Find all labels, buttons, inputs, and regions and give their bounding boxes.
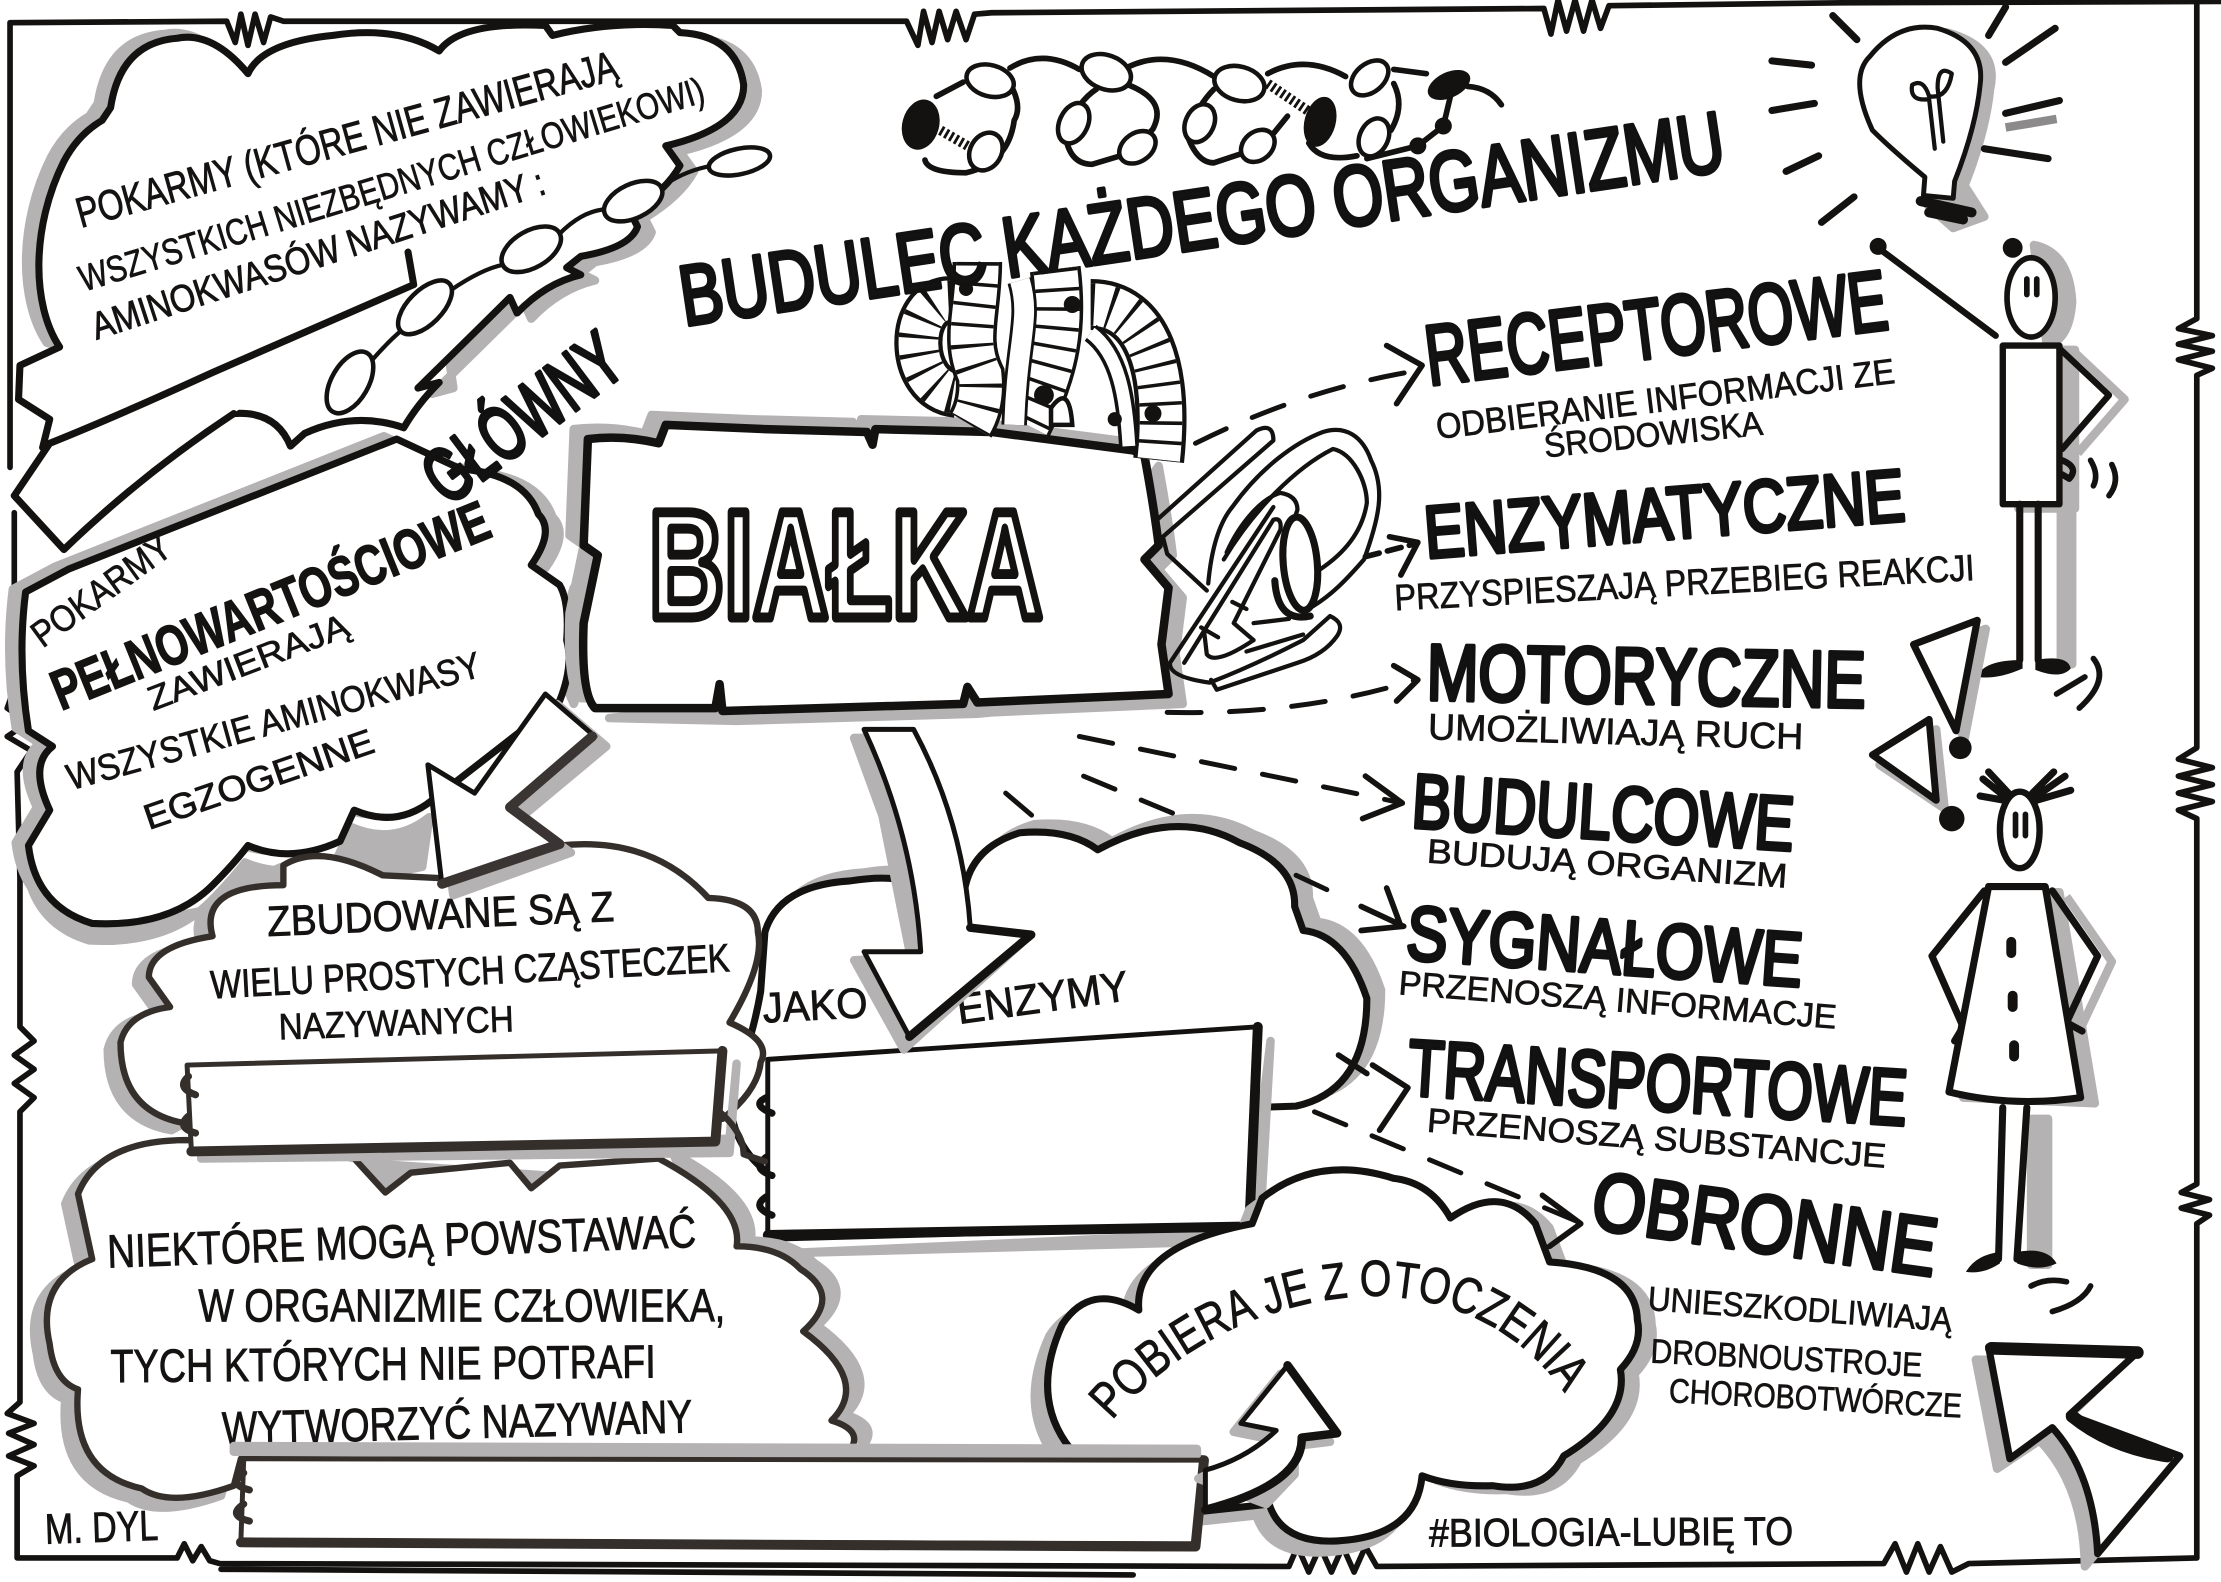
function: obronne: UNIESZKODLIWIAJĄ bbox=[1647, 1280, 1953, 1339]
text: pokarmy pełnowartościowe: POKARMY bbox=[23, 526, 179, 655]
text: jako enzymy bbox=[762, 963, 1131, 1034]
function: obronne: CHOROBOTWÓRCZE bbox=[1668, 1372, 1963, 1425]
text: pokarmy question bbox=[71, 42, 709, 348]
function: sygnałowe: PRZENOSZĄ INFORMACJE bbox=[1397, 964, 1838, 1037]
hashtag: biologia lubię to: #BIOLOGIA-LUBIĘ TO bbox=[1429, 1510, 1793, 1556]
arrow: to transportowe bbox=[1339, 1055, 1408, 1130]
text: zbudowane są z: NAZYWANYCH bbox=[278, 998, 514, 1048]
answer box: exogenous amino acids ribbon bbox=[234, 1446, 1204, 1547]
protein structure: helices bbox=[918, 262, 1161, 460]
arrow: from ribbon to environment cloud bbox=[1198, 1365, 1337, 1511]
cloud: some produced in the body bbox=[34, 1140, 868, 1508]
title: główny budulec każdego organizmu bbox=[407, 95, 1731, 521]
arrow: to receptorowe bbox=[1195, 346, 1422, 443]
function: receptorowe bbox=[1420, 253, 1897, 465]
function: transportowe: PRZENOSZĄ SUBSTANCJE bbox=[1426, 1102, 1888, 1176]
text: pokarmy pełnowartościowe: ZAWIERAJĄ bbox=[142, 607, 355, 718]
protein structure: bead chain top bbox=[896, 48, 1501, 177]
text: pokarmy question: POKARMY (KTÓRE NIE ZAWIERAJĄ bbox=[71, 42, 623, 238]
text: niektóre mogą powstawać bbox=[106, 1205, 725, 1455]
function: transportowe bbox=[1405, 1023, 1910, 1176]
function: receptorowe: RECEPTOROWE bbox=[1420, 253, 1893, 404]
text: zbudowane są z: ZBUDOWANE SĄ Z bbox=[266, 884, 615, 946]
title: główny budulec każdego organizmu: GŁÓWNY bbox=[407, 316, 639, 521]
bead chain: amino acids left bbox=[317, 143, 773, 421]
answer box: molecules bbox=[184, 1051, 765, 1161]
text: pokarmy pełnowartościowe: EGZOGENNE bbox=[138, 721, 379, 838]
text: pokarmy pełnowartościowe: PEŁNOWARTOŚCIOWE bbox=[42, 489, 499, 723]
function: sygnałowe: SYGNAŁOWE bbox=[1404, 891, 1805, 1003]
icon: exclamation marks bbox=[1872, 620, 1986, 831]
heading: białka: BIAŁKA bbox=[649, 481, 1043, 651]
function: transportowe: TRANSPORTOWE bbox=[1405, 1023, 1910, 1142]
arrow: complete proteins to molecules bbox=[428, 694, 606, 895]
function: motoryczne bbox=[1426, 628, 1867, 757]
function: budulcowe: BUDULCOWE bbox=[1410, 759, 1797, 867]
arrow: to sygnałowe bbox=[1006, 776, 1404, 931]
arrow: to motoryczne bbox=[1167, 666, 1418, 713]
text: pokarmy question: WSZYSTKICH NIEZBĘDNYCH CZŁOWIEKOWI) bbox=[74, 70, 709, 299]
answer ribbon: blank label bbox=[14, 252, 414, 550]
text: pokarmy question: AMINOKWASÓW NAZYWAMY : bbox=[86, 161, 550, 348]
function: motoryczne: MOTORYCZNE bbox=[1426, 628, 1867, 724]
arrow: to budulcowe bbox=[1079, 736, 1402, 819]
arrow: białka down to enzymes bbox=[854, 729, 1031, 1049]
icon: light bulb bbox=[1772, 7, 2059, 228]
text: niektóre mogą powstawać: TYCH KTÓRYCH NIE POTRAFI bbox=[110, 1336, 656, 1392]
cloud: takes from environment bbox=[1030, 1166, 1657, 1557]
cloud: built of simple molecules bbox=[108, 844, 763, 1130]
text: zbudowane są z bbox=[209, 884, 731, 1048]
answer box: enzymes bbox=[760, 1027, 1271, 1253]
figure: stick man pointing bbox=[1870, 238, 2125, 708]
text: jako enzymy: ENZYMY bbox=[954, 963, 1131, 1034]
function: obronne: DROBNOUSTROJE bbox=[1650, 1333, 1923, 1385]
text: niektóre mogą powstawać: NIEKTÓRE MOGĄ POWSTAWAĆ bbox=[106, 1205, 697, 1278]
text: zbudowane są z: WIELU PROSTYCH CZĄSTECZEK bbox=[209, 936, 731, 1007]
function: budulcowe bbox=[1410, 759, 1797, 896]
figure: stick woman bbox=[1932, 772, 2112, 1311]
text: jako enzymy: JAKO bbox=[762, 980, 869, 1033]
protein structure: folded loops bbox=[1159, 428, 1379, 690]
function: receptorowe: ŚRODOWISKA bbox=[1542, 404, 1765, 465]
text: pokarmy pełnowartościowe: WSZYSTKIE AMINOKWASY bbox=[62, 644, 485, 798]
text: pokarmy pełnowartościowe bbox=[23, 489, 499, 838]
cloud: complete proteins bbox=[9, 436, 583, 941]
arrow: to obronne bbox=[1314, 1112, 1581, 1246]
title: główny budulec każdego organizmu: BUDULEC KAŻDEGO ORGANIZMU bbox=[673, 95, 1731, 345]
text: niektóre mogą powstawać: WYTWORZYĆ NAZYWANY bbox=[221, 1390, 693, 1455]
function: enzymatyczne: PRZYSPIESZAJĄ PRZEBIEG REAKCJI bbox=[1393, 547, 1975, 618]
main box: białka bbox=[569, 415, 1183, 721]
function: obronne bbox=[1587, 1156, 1963, 1425]
author: m. dyl: M. DYL bbox=[44, 1503, 159, 1554]
function: obronne: OBRONNE bbox=[1587, 1156, 1943, 1294]
text: niektóre mogą powstawać: W ORGANIZMIE CZŁOWIEKA, bbox=[198, 1279, 725, 1331]
function: enzymatyczne bbox=[1393, 453, 1975, 618]
function: receptorowe: ODBIERANIE INFORMACJI ZE bbox=[1434, 351, 1897, 447]
function: enzymatyczne: ENZYMATYCZNE bbox=[1421, 453, 1908, 574]
cloud: polypeptide protein loops enzyme cloud bbox=[730, 818, 1381, 1253]
cloud: foods lacking amino acids bbox=[14, 25, 758, 550]
arrow: to enzymatyczne bbox=[1365, 537, 1418, 575]
function: motoryczne: UMOŻLIWIAJĄ RUCH bbox=[1428, 706, 1804, 757]
text: pobiera je z otoczenia: POBIERA JE Z OTOCZENIA bbox=[1088, 1260, 1586, 1418]
function: budulcowe: BUDUJĄ ORGANIZM bbox=[1426, 833, 1789, 896]
arrow: large bottom right bbox=[1976, 1347, 2180, 1566]
